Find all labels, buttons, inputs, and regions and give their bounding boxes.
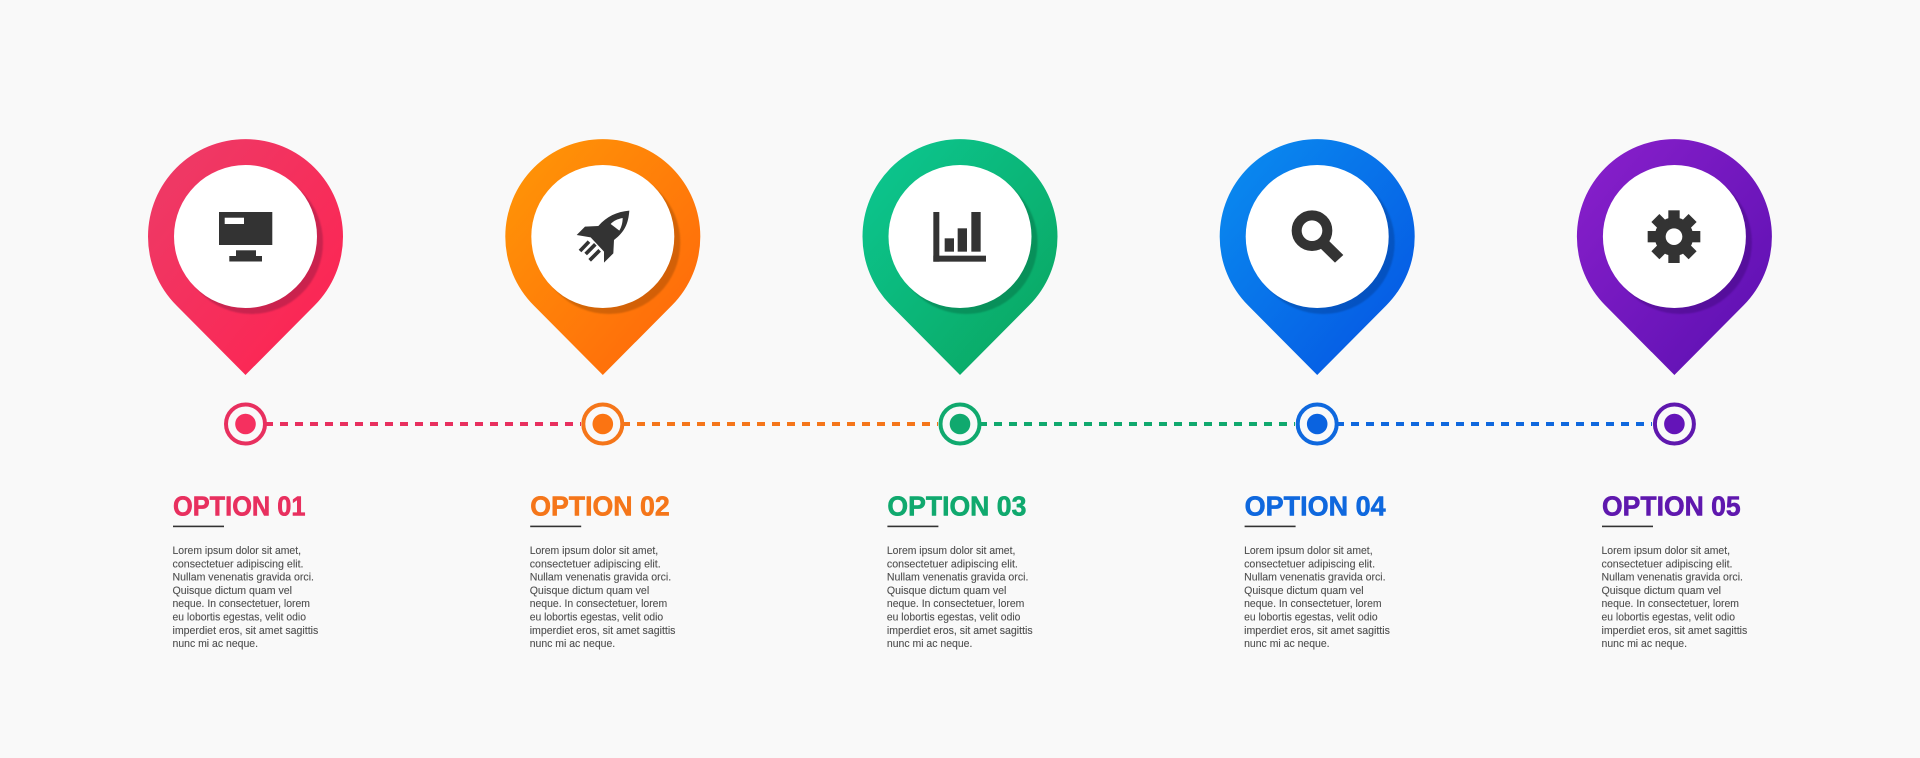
- connector: 02 to 03: [622, 422, 938, 426]
- description 05: eu lobortis egestas, velit odio: [1602, 612, 1735, 624]
- pin 04: [1220, 139, 1415, 375]
- description 02: Quisque dictum quam vel: [530, 585, 649, 597]
- description 02: eu lobortis egestas, velit odio: [530, 612, 663, 624]
- marker 02: [583, 404, 622, 444]
- description 05: [1602, 545, 1748, 650]
- icon: magnifier: [1297, 215, 1343, 263]
- heading 05: OPTION 05: [1602, 490, 1741, 522]
- description 03: [887, 545, 1033, 650]
- description 01: Nullam venenatis gravida orci.: [172, 572, 314, 584]
- description 05: Quisque dictum quam vel: [1602, 585, 1721, 597]
- icon: monitor: [219, 212, 272, 262]
- description 04: eu lobortis egestas, velit odio: [1244, 612, 1378, 624]
- connector: 04 to 05: [1336, 422, 1652, 426]
- description 03: imperdiet eros, sit amet sagittis: [887, 625, 1033, 637]
- marker 01: [226, 404, 265, 444]
- description 04: nunc mi ac neque.: [1244, 638, 1330, 650]
- description 01: imperdiet eros, sit amet sagittis: [172, 625, 319, 637]
- description 05: neque. In consectetuer, lorem: [1602, 598, 1739, 610]
- pin 02: [505, 139, 700, 375]
- text block 05: [1602, 490, 1748, 650]
- text block 04: [1244, 490, 1390, 650]
- text block 02: [530, 490, 676, 650]
- pin 03: [862, 139, 1058, 375]
- description 02: [530, 545, 676, 650]
- description 04: Nullam venenatis gravida orci.: [1244, 572, 1386, 584]
- description 05: nunc mi ac neque.: [1602, 638, 1687, 650]
- description 03: eu lobortis egestas, velit odio: [887, 612, 1020, 624]
- connector: 01 to 02: [265, 422, 581, 426]
- description 05: Nullam venenatis gravida orci.: [1602, 572, 1743, 584]
- description 02: neque. In consectetuer, lorem: [530, 598, 667, 610]
- description 01: [172, 545, 319, 650]
- marker 04: [1298, 404, 1337, 444]
- description 03: Lorem ipsum dolor sit amet,: [887, 545, 1015, 557]
- connector: 03 to 04: [979, 422, 1295, 426]
- description 04: imperdiet eros, sit amet sagittis: [1244, 625, 1390, 637]
- description 01: Lorem ipsum dolor sit amet,: [172, 545, 301, 557]
- description 02: nunc mi ac neque.: [530, 638, 615, 650]
- description 04: Lorem ipsum dolor sit amet,: [1244, 545, 1373, 557]
- pin 01: [148, 139, 343, 375]
- description 03: nunc mi ac neque.: [887, 638, 972, 650]
- description 02: Nullam venenatis gravida orci.: [530, 572, 671, 584]
- icon: bar chart: [933, 212, 986, 262]
- description 04: [1244, 545, 1390, 650]
- pin 05: [1577, 139, 1772, 375]
- description 05: consectetuer adipiscing elit.: [1602, 558, 1732, 570]
- description 01: Quisque dictum quam vel: [172, 585, 292, 597]
- icon: rocket: [577, 211, 629, 263]
- description 01: nunc mi ac neque.: [172, 638, 258, 650]
- marker 05: [1655, 404, 1694, 444]
- heading 01: OPTION 01: [173, 490, 306, 522]
- description 01: consectetuer adipiscing elit.: [172, 558, 304, 570]
- description 04: neque. In consectetuer, lorem: [1244, 598, 1382, 610]
- icon: gear: [1648, 210, 1700, 263]
- description 05: imperdiet eros, sit amet sagittis: [1602, 625, 1748, 637]
- text block 03: [887, 490, 1033, 650]
- description 01: neque. In consectetuer, lorem: [172, 598, 310, 610]
- heading 03: OPTION 03: [887, 490, 1026, 522]
- description 04: consectetuer adipiscing elit.: [1244, 558, 1375, 570]
- description 02: consectetuer adipiscing elit.: [530, 558, 661, 570]
- description 01: eu lobortis egestas, velit odio: [172, 612, 306, 624]
- heading 04: OPTION 04: [1245, 490, 1386, 522]
- heading 02: OPTION 02: [530, 490, 670, 522]
- description 03: Quisque dictum quam vel: [887, 585, 1006, 597]
- description 03: Nullam venenatis gravida orci.: [887, 572, 1028, 584]
- description 04: Quisque dictum quam vel: [1244, 585, 1364, 597]
- description 03: neque. In consectetuer, lorem: [887, 598, 1024, 610]
- description 05: Lorem ipsum dolor sit amet,: [1602, 545, 1730, 557]
- description 02: imperdiet eros, sit amet sagittis: [530, 625, 676, 637]
- marker 03: [940, 404, 980, 444]
- description 03: consectetuer adipiscing elit.: [887, 558, 1018, 570]
- description 02: Lorem ipsum dolor sit amet,: [530, 545, 658, 557]
- text block 01: [172, 490, 319, 650]
